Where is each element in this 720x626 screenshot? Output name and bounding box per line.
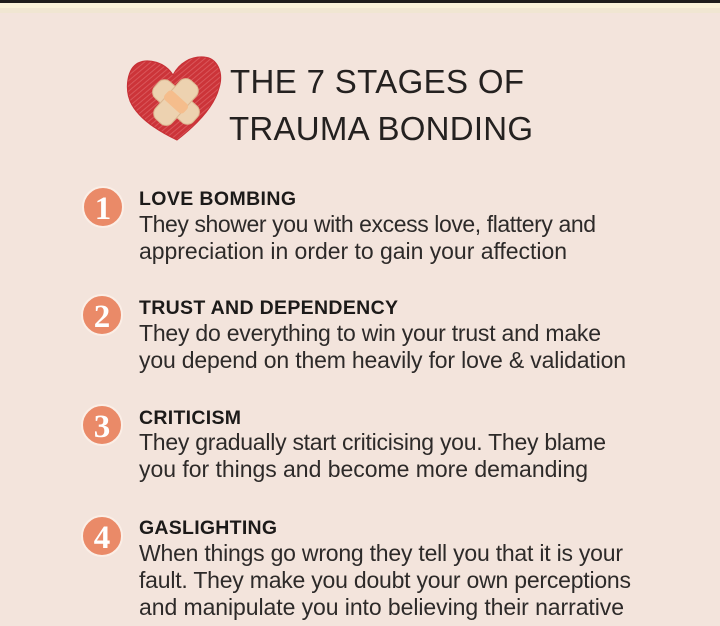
top border strip xyxy=(0,0,720,13)
stage 3: criticism xyxy=(82,405,606,482)
stage 2: trust and dependency xyxy=(82,295,626,373)
stage 3 description: you for things and become more demanding xyxy=(139,456,588,482)
stage 1 description: They shower you with excess love, flattery and xyxy=(139,211,596,237)
stage 1 description xyxy=(139,211,596,264)
stage 4: gaslighting xyxy=(82,516,631,620)
stage 4 description: fault. They make you doubt your own perceptions xyxy=(139,567,631,593)
stage 2 description xyxy=(139,320,626,373)
stage 3 description: They gradually start criticising you. They blame xyxy=(139,429,606,455)
stage 1 heading: LOVE BOMBING xyxy=(139,188,296,210)
title: THE 7 STAGES OF xyxy=(230,63,524,100)
title xyxy=(229,63,533,147)
stage 1: love bombing xyxy=(83,187,596,264)
stage 2 description: They do everything to win your trust and make xyxy=(139,320,601,346)
icon: number 3 badge: 3 xyxy=(94,409,110,445)
stage 3 description xyxy=(139,429,606,482)
icon: number 1 badge: 1 xyxy=(95,191,111,227)
icon: number 2 badge xyxy=(82,295,122,335)
icon: number 4 badge: 4 xyxy=(94,520,110,556)
stage 4 heading: GASLIGHTING xyxy=(139,517,277,539)
stage 4 description: and manipulate you into believing their narrative xyxy=(139,594,624,620)
stage 4 description: When things go wrong they tell you that it is your xyxy=(139,540,623,566)
icon: number 1 badge xyxy=(83,187,123,227)
stage 4 description xyxy=(139,540,631,620)
stage 2 description: you depend on them heavily for love & validation xyxy=(139,347,626,373)
stage 3 heading: CRITICISM xyxy=(139,407,241,429)
title: TRAUMA BONDING xyxy=(229,110,533,147)
stage 2 heading: TRUST AND DEPENDENCY xyxy=(139,297,398,319)
stage 1 description: appreciation in order to gain your affection xyxy=(139,238,567,264)
icon: number 2 badge: 2 xyxy=(94,299,110,335)
icon: number 3 badge xyxy=(82,405,122,445)
icon: number 4 badge xyxy=(82,516,122,556)
icon: heart with bandage xyxy=(127,57,221,140)
